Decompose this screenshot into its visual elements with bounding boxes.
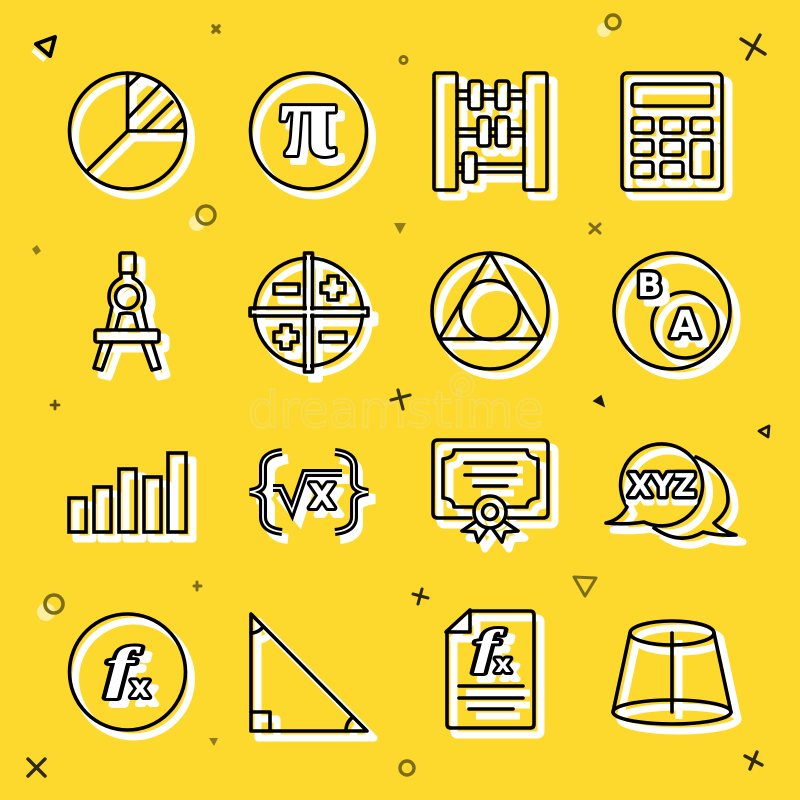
icon: function in circle (70, 614, 192, 737)
icon: triangle in circles (432, 253, 555, 376)
icon: truncated cone (613, 621, 738, 731)
icon: bar chart (69, 453, 193, 539)
fx symbol: x (130, 670, 150, 705)
icon: drawing compass (94, 253, 167, 377)
icon: braces with square root of x (250, 452, 375, 539)
letter x: X (309, 477, 335, 517)
fx symbol (106, 637, 150, 705)
fx symbol: f (106, 637, 142, 699)
icon: set B contains A (614, 253, 737, 376)
letter B: B (637, 266, 662, 304)
fx symbol: f (474, 621, 504, 674)
icon: pi in circle (250, 61, 372, 196)
icon: diploma certificate (433, 440, 555, 549)
label XYZ: XYZ (628, 468, 696, 504)
icon: pie chart (70, 73, 192, 196)
letter A: A (671, 303, 700, 346)
icon: speech bubbles (606, 444, 743, 545)
fx symbol: x (495, 649, 511, 678)
pi symbol: π (280, 61, 336, 178)
fx symbol (474, 621, 511, 678)
icon: calculator (622, 73, 729, 197)
icon: plus minus quadrants (250, 253, 375, 379)
icon: formula document (446, 610, 541, 735)
watermark: dreamstime (248, 381, 544, 439)
icon: abacus (434, 73, 554, 197)
icon: right triangle (251, 614, 374, 738)
